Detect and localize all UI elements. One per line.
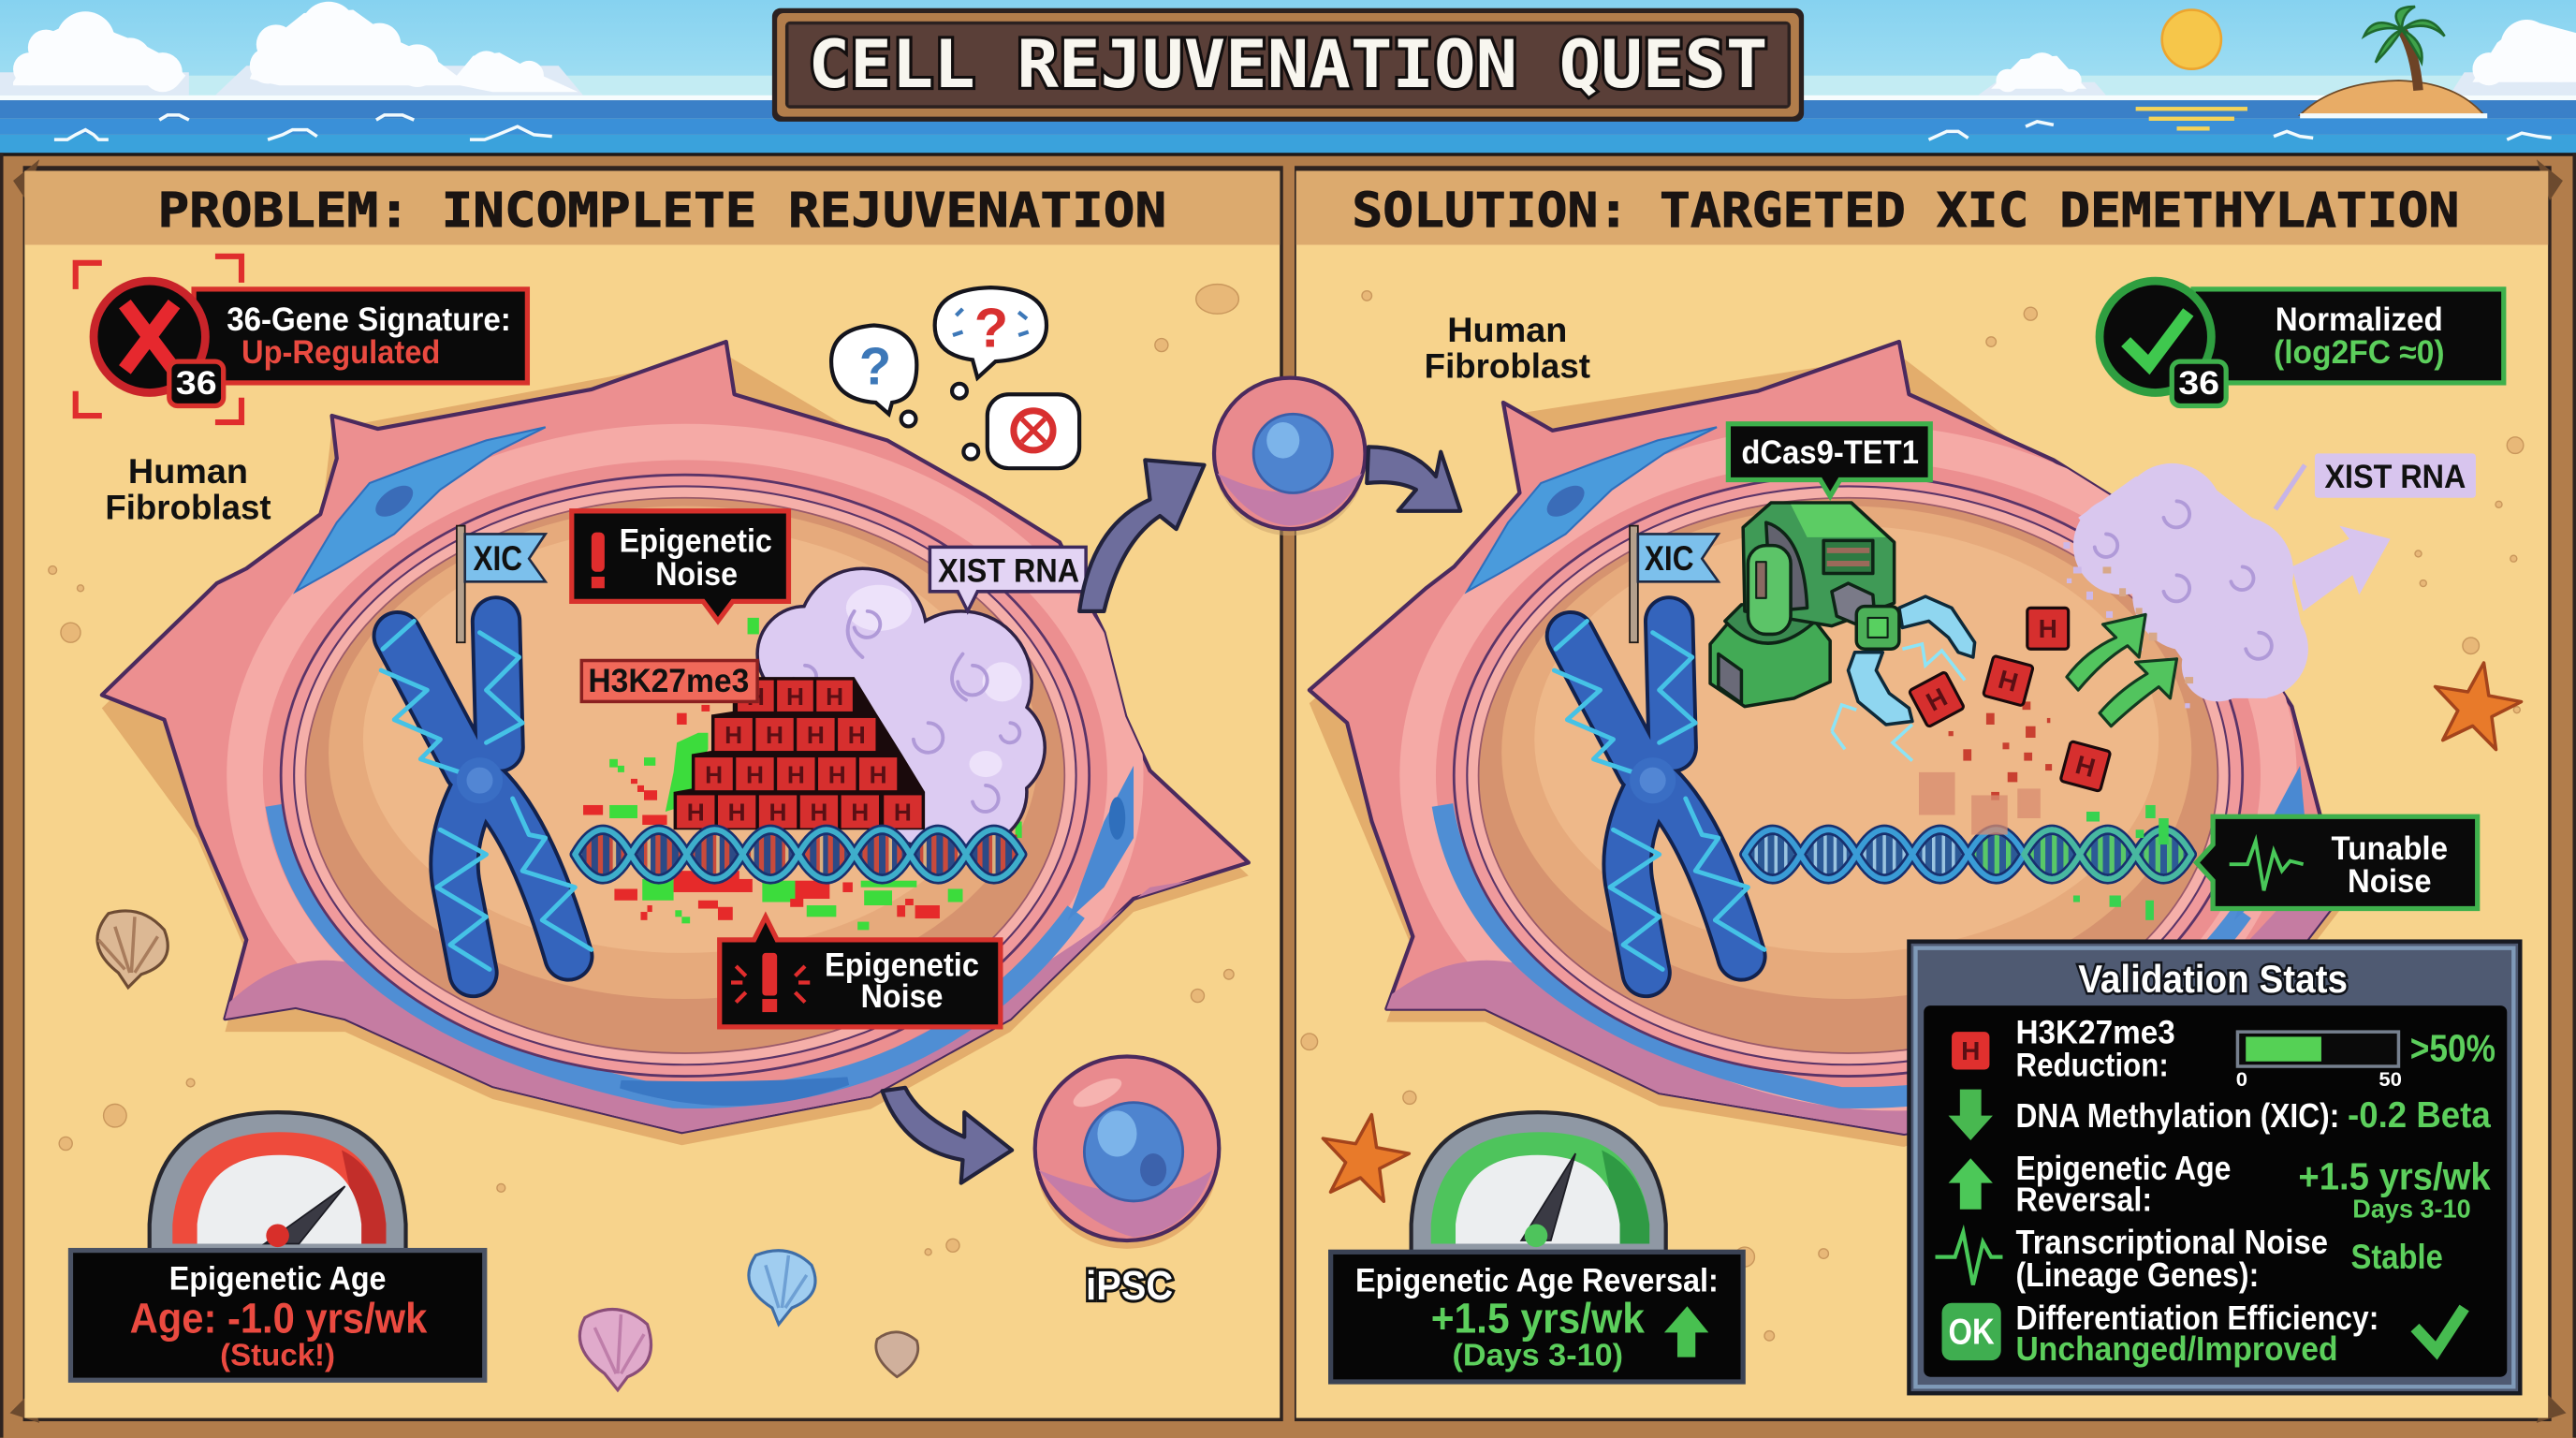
arrow: to iPSC [882, 1088, 1012, 1183]
histone H block stack: H [810, 799, 827, 827]
gauge: epigenetic age: (Stuck!) [220, 1338, 335, 1372]
histone blocks: scattered: H [1996, 665, 2021, 697]
label: human fibroblast problem: Human [128, 452, 248, 491]
histone H block stack: H [728, 799, 746, 827]
XIC flag: problem: XIC [473, 539, 522, 578]
label: iPSC: iPSC [1086, 1263, 1173, 1309]
label: human fibroblast problem [105, 452, 271, 527]
row: H3K27me3 reduction [1952, 1014, 2496, 1091]
callout: epigenetic noise bottom: Noise [861, 978, 943, 1015]
panel header band: solution [1296, 171, 2548, 244]
callout: epigenetic noise bottom [720, 917, 1001, 1027]
label: human fibroblast solution [1425, 311, 1590, 386]
fibroblast cell: solution [1310, 342, 2382, 1183]
row: epigenetic age reversal [1949, 1149, 2491, 1223]
gauge: epigenetic age: Epigenetic Age [169, 1261, 386, 1298]
histone H block stack [674, 677, 925, 829]
gauge: epigenetic age: Age: -1.0 yrs/wk [130, 1294, 428, 1342]
row: H3K27me3 reduction: H3K27me3 [2016, 1014, 2175, 1050]
green arrows [2067, 614, 2177, 726]
gauge: epigenetic age reversal: +1.5 yrs/wk [1431, 1294, 1645, 1342]
heading: problem: PROBLEM: INCOMPLETE REJUVENATION [157, 183, 1166, 239]
label: H3K27me3: H3K27me3 [588, 663, 749, 699]
row: differentiation efficiency: Differentiation Efficiency: [2016, 1299, 2378, 1337]
row: epigenetic age reversal: Reversal: [2016, 1180, 2152, 1218]
row: H3K27me3 reduction: Reduction: [2016, 1048, 2169, 1084]
histone H block stack: H [786, 682, 804, 711]
chromosome: solution [1554, 621, 1764, 973]
histone H block stack: H [769, 799, 787, 827]
panel: validation stats [1909, 942, 2520, 1393]
row: H3K27me3 reduction: 50 [2378, 1069, 2402, 1091]
histone H block stack: H [747, 682, 765, 711]
sand pebbles [49, 285, 1238, 1255]
heading: solution: SOLUTION: TARGETED XIC DEMETHYLATION [1352, 183, 2459, 239]
row: transcriptional noise: (Lineage Genes): [2016, 1255, 2259, 1294]
gauge: epigenetic age [70, 1112, 485, 1380]
badge: 36-gene signature: 36-Gene Signature: [227, 301, 511, 338]
row: H3K27me3 reduction: H [1961, 1036, 1980, 1065]
starfish: upper right [2436, 663, 2522, 750]
stats title: Validation Stats [2078, 957, 2348, 1001]
histone blocks: scattered: H [1922, 682, 1952, 717]
histone blocks: scattered [1909, 608, 2111, 791]
sand pebbles [1301, 291, 2524, 1341]
label: XIST RNA solution: XIST RNA [2324, 459, 2466, 495]
thought bubbles [831, 287, 1079, 468]
badge: normalized: Normalized [2276, 301, 2443, 338]
row: differentiation efficiency: OK [1949, 1313, 1995, 1353]
panel: problem [24, 171, 1280, 1418]
seashell: small tan [876, 1332, 918, 1377]
histone H block stack: H [851, 799, 869, 827]
title text: CELL REJUVENATION QUEST [809, 26, 1767, 103]
lightning sparks [1832, 644, 1965, 761]
histone H block stack: H [870, 760, 887, 788]
iPSC cell [1035, 1056, 1219, 1249]
histone H block stack: H [746, 760, 764, 788]
row: transcriptional noise: Stable [2351, 1238, 2443, 1276]
seashell: tan [97, 911, 168, 988]
epigenetic noise pixels [583, 618, 1022, 930]
badge: normalized: 36 [2178, 365, 2219, 402]
XIST RNA dissolving cloud with arrow [2063, 463, 2391, 708]
label: dCas9-TET1: dCas9-TET1 [1741, 434, 1919, 471]
callout: epigenetic noise bottom: Epigenetic [825, 946, 979, 983]
row: DNA methylation: DNA Methylation (XIC): [2016, 1096, 2339, 1135]
histone blocks: scattered: H [2039, 614, 2057, 643]
label: dCas9-TET1 [1728, 424, 1930, 496]
histone H block stack: H [828, 760, 846, 788]
nucleus: solution [1454, 475, 2243, 1077]
chromosome: problem [381, 621, 592, 973]
XIST RNA cloud: problem [759, 570, 1043, 844]
histone H block stack: H [687, 799, 705, 827]
row: transcriptional noise [1936, 1223, 2443, 1294]
island with palm tree [2300, 7, 2487, 118]
histone H block stack: H [705, 760, 723, 788]
callout: epigenetic noise top [572, 511, 788, 621]
gauge: epigenetic age reversal: Epigenetic Age Reversal: [1355, 1262, 1719, 1299]
row: epigenetic age reversal: Days 3-10 [2352, 1194, 2471, 1223]
clouds [0, 2, 2576, 95]
XIC flag: solution [1630, 526, 1719, 642]
histone H block stack: H [826, 682, 843, 711]
thought bubbles: ? [974, 296, 1008, 359]
badge: 36-gene signature: Up-Regulated [242, 334, 440, 371]
panel header band: problem [24, 171, 1280, 244]
badge: normalized [2100, 281, 2504, 405]
intermediate cell [1214, 378, 1365, 536]
title plaque [772, 8, 1804, 122]
histone H block stack: H [766, 721, 783, 749]
row: transcriptional noise: Transcriptional Noise [2016, 1223, 2328, 1261]
badge: 36-gene signature [76, 257, 527, 422]
thought bubbles: ? [859, 337, 891, 396]
debris: faded and red pixels, green noise [1919, 701, 2169, 920]
label: human fibroblast problem: Fibroblast [105, 489, 271, 527]
DNA helix: problem [575, 822, 1022, 888]
nucleus: problem [281, 475, 1090, 1077]
badge: 36-gene signature: 36 [176, 365, 217, 402]
callout: tunable noise [2197, 816, 2478, 909]
label: human fibroblast solution: Human [1447, 311, 1567, 349]
label: human fibroblast solution: Fibroblast [1425, 347, 1590, 386]
machine: dCas9-TET1 [1710, 503, 1975, 725]
callout: epigenetic noise top: Epigenetic [620, 523, 772, 560]
gauge: epigenetic age reversal: (Days 3-10) [1453, 1338, 1623, 1372]
arrow: intermediate cell to right fibroblast [1367, 447, 1460, 511]
sky and sea background [0, 0, 2576, 157]
panel: solution [1296, 171, 2548, 1418]
badge: normalized: (log2FC ≈0) [2274, 334, 2445, 371]
label: XIST RNA problem [929, 547, 1086, 611]
label: XIST RNA problem: XIST RNA [938, 552, 1079, 589]
row: differentiation efficiency: Unchanged/Improved [2016, 1329, 2338, 1368]
gauge: epigenetic age reversal [1331, 1112, 1743, 1382]
starfish: lower left [1323, 1115, 1409, 1201]
DNA helix: solution [1745, 822, 2191, 888]
callout: tunable noise: Tunable [2331, 830, 2448, 867]
row: differentiation efficiency [1942, 1299, 2465, 1368]
XIC flag: solution: XIC [1645, 539, 1694, 578]
seashell: pink [579, 1310, 651, 1390]
callout: tunable noise: Noise [2348, 863, 2432, 900]
histone H block stack: H [894, 799, 912, 827]
sun [2162, 10, 2221, 69]
row: epigenetic age reversal: +1.5 yrs/wk [2298, 1155, 2491, 1198]
histone H block stack: H [724, 721, 742, 749]
row: H3K27me3 reduction: 0 [2236, 1069, 2247, 1091]
row: DNA methylation: -0.2 Beta [2348, 1095, 2491, 1136]
row: epigenetic age reversal: Epigenetic Age [2016, 1149, 2231, 1187]
seashell: blue [749, 1251, 815, 1325]
histone H block stack: H [807, 721, 825, 749]
histone H block stack: H [787, 760, 805, 788]
histone H block stack: H [848, 721, 866, 749]
fibroblast cell: problem [102, 342, 1249, 1183]
XIC flag: problem [457, 526, 546, 642]
row: H3K27me3 reduction: >50% [2410, 1027, 2496, 1070]
arrow: XIST RNA to intermediate cell [1079, 460, 1204, 611]
histone blocks: scattered: H [2072, 750, 2099, 783]
row: DNA methylation [1949, 1090, 2491, 1140]
callout: epigenetic noise top: Noise [655, 556, 738, 593]
